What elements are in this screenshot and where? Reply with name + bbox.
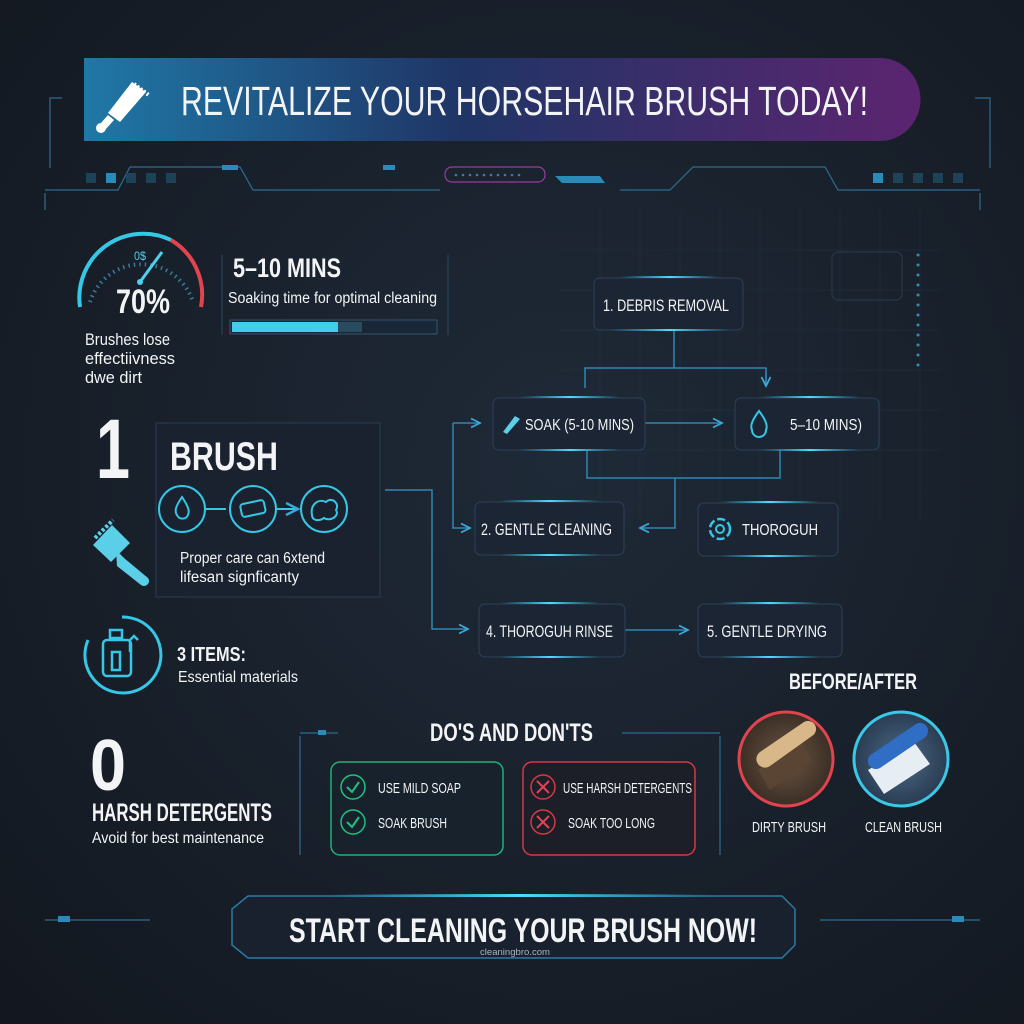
big number 1: 1 [96,402,130,496]
stat: 0 harsh detergents [90,726,272,847]
stat: 0 harsh detergents: 0 [90,726,126,806]
panel: brush [156,423,380,597]
before/after [739,669,948,836]
step: debris removal [594,276,743,331]
stat: 0 harsh detergents: Avoid for best maintenance [92,830,264,847]
before/after: BEFORE/AFTER [789,669,917,694]
icon: brush [96,82,150,133]
text: brushes lose effectiveness: dwe dirt [85,368,142,387]
dos and donts [300,719,720,855]
step: thorough [698,501,838,557]
text: brushes lose effectiveness: effectiivness [85,349,175,368]
text: brushes lose effectiveness [85,330,175,387]
call to action button: cleaningbro.com [480,947,550,957]
frame lines [45,98,990,920]
do box: SOAK BRUSH [378,815,447,832]
text: brushes lose effectiveness: Brushes lose [85,330,170,349]
step: gentle cleaning: 2. GENTLE CLEANING [481,520,612,539]
panel: brush: BRUSH [170,435,278,479]
stat: soaking time: 5–10 MINS [233,253,341,283]
clean brush [854,712,948,836]
icon: paint brush [93,520,149,586]
stat: 3 items: 3 ITEMS: [177,644,246,666]
dont box: SOAK TOO LONG [568,815,655,832]
step: gentle cleaning [475,500,624,556]
step: thorough rinse [479,602,625,658]
call to action button [232,894,795,958]
step: soak [493,396,645,451]
step: debris removal: 1. DEBRIS REMOVAL [603,296,729,315]
step: soak: SOAK (5-10 MINS) [525,417,634,434]
gauge: 70%: 0$ [134,249,146,263]
step: thorough: THOROGUH [742,522,818,539]
dos and donts: DO'S AND DON'TS [430,719,593,747]
icon: bottle [85,617,161,693]
gauge: 70% [79,234,202,321]
dont box [523,762,695,855]
clean brush: CLEAN BRUSH [865,819,942,836]
stat: 0 harsh detergents: HARSH DETERGENTS [92,799,272,827]
dirty brush: DIRTY BRUSH [752,819,826,836]
stat: 3 items: Essential materials [178,669,298,686]
step: 5-10 mins: 5–10 MINS) [790,417,862,434]
do box: USE MILD SOAP [378,780,461,797]
step: 5-10 mins [735,396,879,451]
flowchart [385,276,879,658]
step: gentle drying: 5. GENTLE DRYING [707,622,827,641]
do box [331,762,503,855]
panel: brush: lifesan signficanty [180,569,299,586]
stat: 3 items [177,644,298,686]
panel: brush: Proper care can 6xtend [180,550,325,567]
title banner [84,58,920,141]
step: thorough rinse: 4. THOROGUH RINSE [486,622,613,641]
dirty brush [739,712,833,836]
stat: soaking time: Soaking time for optimal cleaning [228,290,437,307]
step: gentle drying [698,602,842,658]
call to action button: START CLEANING YOUR BRUSH NOW! [289,912,757,950]
stat: soaking time [222,253,448,335]
dont box: USE HARSH DETERGENTS [563,781,692,797]
gauge: 70%: 70% [116,283,170,321]
